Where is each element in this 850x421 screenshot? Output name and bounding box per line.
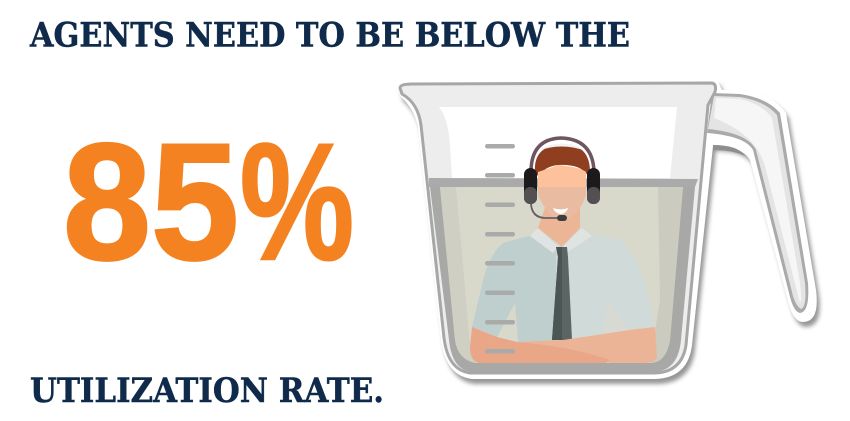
smile [553,208,568,214]
headband [531,138,594,172]
handle highlight [714,98,801,303]
measurement marks [485,144,515,354]
face [538,165,586,223]
jug glass body [400,83,716,373]
jug sticker shadow [401,85,820,384]
big number: 85% [63,110,354,295]
arms [517,327,657,363]
agent figure [470,138,657,363]
headset ear cup right [587,168,600,204]
big number: 85%: % [240,110,354,295]
handle fill [708,96,806,309]
heading: bottom line: UTILIZATION RATE. [30,371,384,411]
jug handle [707,93,808,313]
shirt fold [602,300,630,340]
headset ear cup left [524,168,537,204]
big number: 85%: 85 [63,110,239,295]
shirt [472,234,655,342]
water [430,187,695,372]
microphone boom [531,204,560,218]
water surface band [429,178,698,187]
illustration: measuring jug with agent [398,80,820,384]
handle underside shadow [713,145,745,156]
collar [530,228,558,253]
heading: top line: AGENTS NEED TO BE BELOW THE [29,16,630,56]
handle outline [707,93,808,313]
tie [552,247,572,340]
neck [538,205,580,247]
jug inner clear area [439,107,677,178]
sticker white border [398,80,817,379]
hair [535,144,590,176]
